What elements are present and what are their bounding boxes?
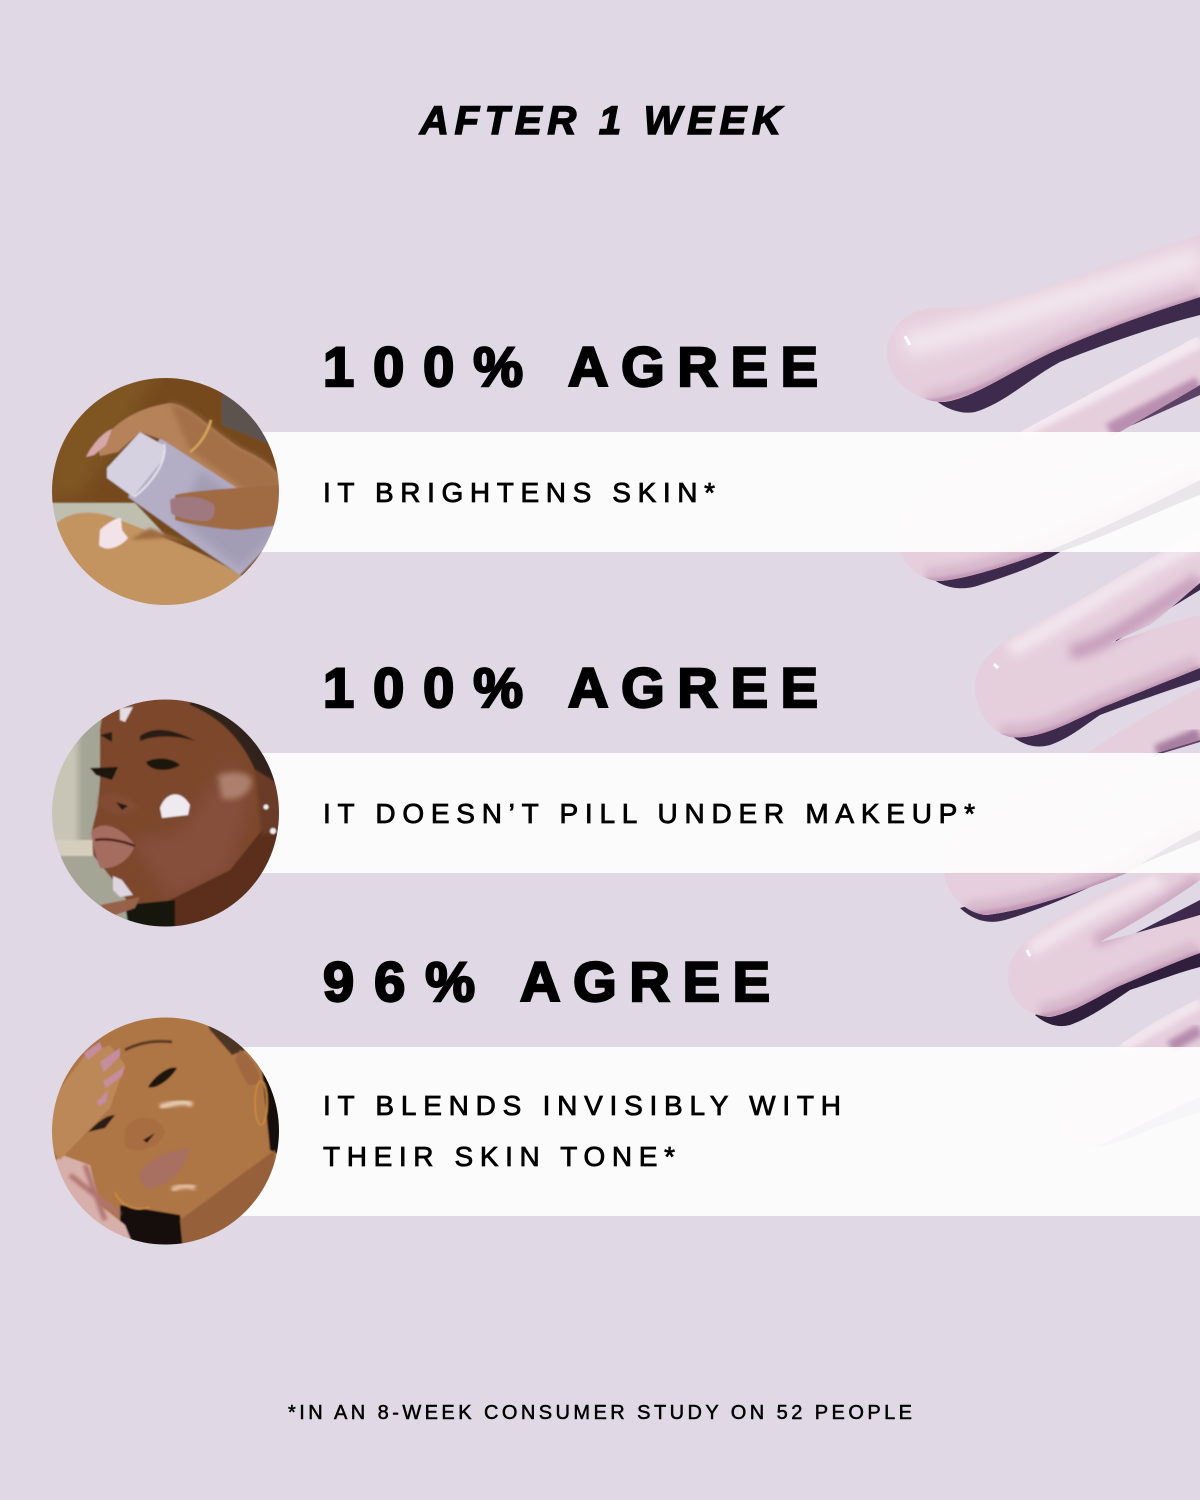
statement 3: THEIR SKIN TONE*	[323, 1141, 675, 1172]
title: AFTER 1 WEEK	[419, 99, 784, 143]
stat heading 2: 100%	[323, 656, 523, 719]
swoosh 3	[975, 552, 1200, 746]
stat heading 3: 96%	[323, 950, 475, 1013]
photo 1: applying cream from a bottle	[52, 378, 279, 605]
stat heading 1: 100%	[323, 335, 523, 398]
band 2	[200, 753, 1200, 873]
stat heading 2	[323, 656, 818, 719]
cream swooshes	[887, 236, 1200, 1047]
stat heading 3	[323, 950, 770, 1013]
stat heading 1	[323, 335, 818, 398]
photo 3: face with hand on forehead	[52, 1018, 279, 1244]
band 1	[200, 432, 1200, 552]
statement 1: IT BRIGHTENS SKIN*	[323, 477, 715, 508]
swoosh 1	[887, 235, 1200, 413]
stat heading 2: AGREE	[568, 656, 818, 719]
statement 2: IT DOESN’T PILL UNDER MAKEUP*	[323, 798, 975, 829]
stat heading 3: AGREE	[520, 950, 770, 1013]
photo 2: face with cream dabs	[52, 700, 279, 926]
swoosh 4	[944, 687, 1200, 922]
statement 3	[323, 1090, 841, 1172]
swoosh 5	[1008, 865, 1200, 1026]
footnote: *IN AN 8-WEEK CONSUMER STUDY ON 52 PEOPLE	[288, 1402, 912, 1424]
stat heading 1: AGREE	[568, 335, 818, 398]
swoosh 6	[1118, 998, 1200, 1047]
swoosh 2	[897, 335, 1200, 588]
band 3	[200, 1047, 1200, 1216]
statement 3: IT BLENDS INVISIBLY WITH	[323, 1090, 841, 1121]
